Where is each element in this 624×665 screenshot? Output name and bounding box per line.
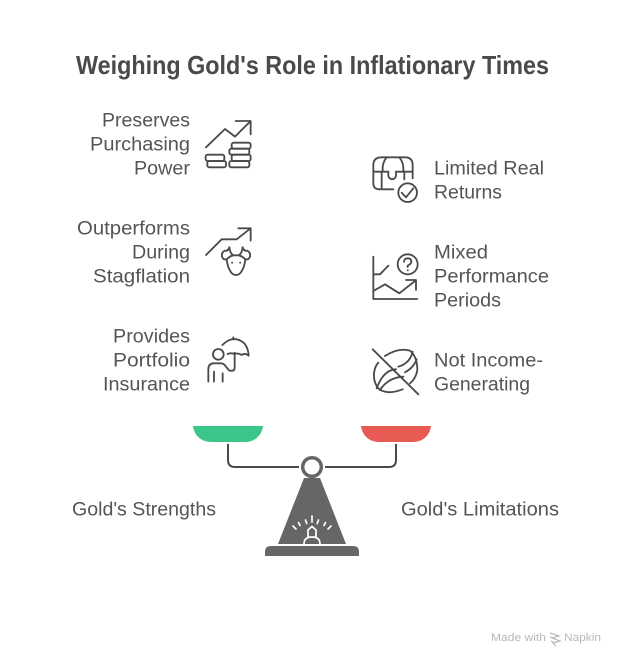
text: outperforms during stagflation	[77, 218, 190, 288]
fulcrum	[278, 478, 346, 544]
icon: treasure chest with check	[373, 157, 417, 202]
watermark	[491, 632, 601, 646]
text: limited real returns: Limited Real	[434, 158, 544, 180]
text: provides portfolio insurance: Provides	[113, 326, 190, 348]
left beam	[228, 444, 299, 467]
text: preserves purchasing power: Purchasing	[90, 134, 190, 156]
watermark: Napkin	[564, 632, 601, 644]
pivot ring	[303, 458, 321, 476]
text: preserves purchasing power: Power	[134, 158, 191, 180]
watermark: Made with	[491, 632, 546, 644]
icon: alert light on fulcrum	[293, 516, 331, 544]
text: mixed performance periods: Performance	[434, 266, 549, 288]
red pan	[361, 426, 431, 442]
text: preserves purchasing power	[90, 110, 191, 180]
title: Weighing Gold's Role in Inflationary Times	[76, 50, 549, 80]
label: gold's strengths: Gold's Strengths	[72, 500, 216, 520]
icon: person under umbrella	[208, 337, 249, 382]
base	[265, 546, 359, 556]
text: provides portfolio insurance: Portfolio	[113, 350, 190, 372]
green pan	[193, 426, 263, 442]
icon: rising arrow over coin stacks	[206, 121, 251, 167]
text: provides portfolio insurance: Insurance	[103, 374, 190, 396]
icon: rising arrow over bull head	[206, 228, 251, 275]
icon: line chart with question mark	[373, 254, 418, 299]
text: limited real returns	[434, 158, 544, 204]
scale	[193, 426, 431, 556]
text: mixed performance periods	[434, 242, 549, 312]
text: mixed performance periods: Mixed	[434, 242, 488, 264]
text: limited real returns: Returns	[434, 182, 502, 204]
right beam	[325, 444, 396, 467]
text: outperforms during stagflation: Stagflation	[93, 266, 190, 288]
text: provides portfolio insurance	[103, 326, 190, 396]
text: outperforms during stagflation: During	[132, 242, 190, 264]
text: preserves purchasing power: Preserves	[102, 110, 190, 132]
text: outperforms during stagflation: Outperforms	[77, 218, 190, 240]
icon: crossed-out leaf	[373, 349, 418, 394]
text: not income-generating: Generating	[434, 374, 530, 396]
label: gold's limitations: Gold's Limitations	[401, 500, 559, 520]
text: not income-generating: Not Income-	[434, 350, 543, 372]
text: mixed performance periods: Periods	[434, 290, 501, 312]
text: not income-generating	[434, 350, 543, 396]
